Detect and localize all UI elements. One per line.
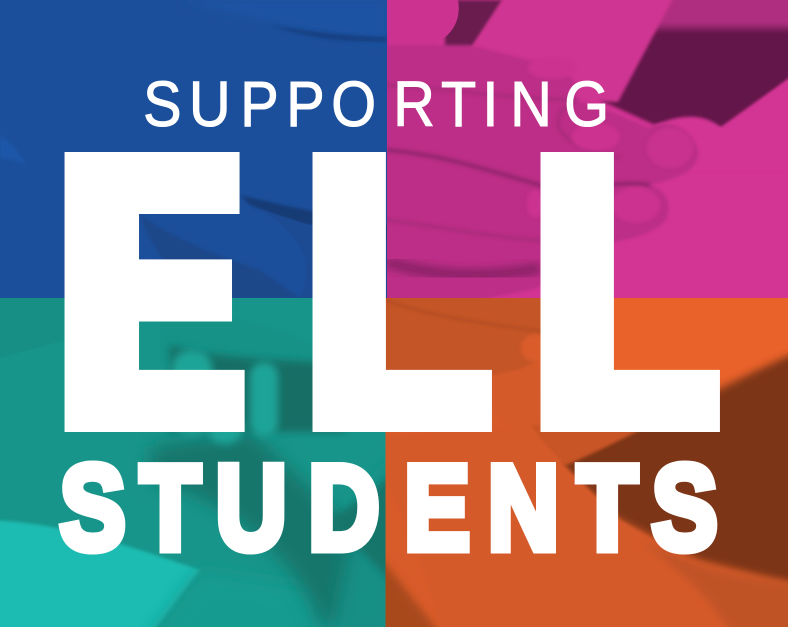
finger shadows	[387, 85, 620, 158]
fingernails	[528, 62, 568, 79]
heading: STUDENTS: STUDENTS	[60, 442, 718, 575]
heading: ELL	[67, 81, 713, 503]
long finger	[470, 0, 675, 102]
hand	[380, 45, 698, 300]
heading: ELL: L	[537, 81, 713, 503]
heading: ELL: L	[309, 81, 485, 503]
dark background wedge	[600, 22, 788, 128]
panel: teal hand quadrant	[0, 298, 400, 627]
panel: magenta hand quadrant	[380, 0, 788, 310]
heading: SUPPORTING: SUPPORTING	[143, 68, 609, 140]
heading: ELL: E	[67, 81, 236, 503]
panel: blue hand quadrant	[0, 0, 387, 298]
panel: orange hand quadrant	[370, 280, 788, 627]
bright palm	[540, 64, 788, 310]
